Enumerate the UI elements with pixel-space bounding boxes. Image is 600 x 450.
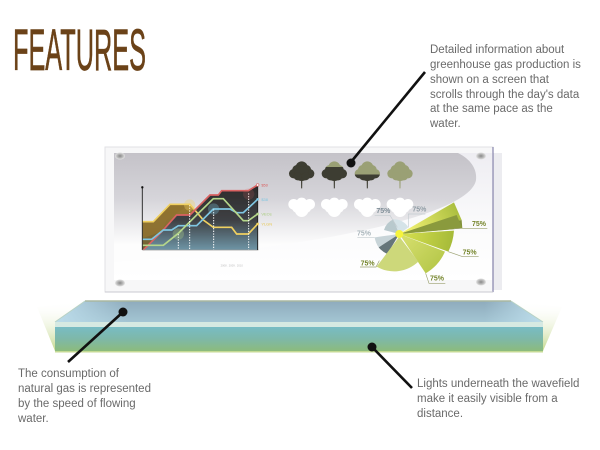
text: screen description: at the same pace as the [430,103,553,115]
line chart: VEOs [261,212,272,217]
title: FEATURES [13,19,146,83]
panel: glass display screen [105,147,502,292]
polar pie chart: 75% [430,276,445,283]
line chart: 2008 . 2009 . 2010 [221,264,243,268]
line chart: $38 [261,197,269,202]
polar pie chart: 75% [412,206,427,213]
line chart [141,183,272,268]
text: screen description: greenhouse gas production is [430,59,581,71]
text: screen description: shown on a screen that [430,74,550,86]
text: screen description: scrolls through the day's data [430,89,580,101]
polar pie chart: 75% [472,221,487,228]
leader line: lights callout [368,342,412,388]
polar pie chart: 75% [376,208,391,215]
polar pie chart: 75% [463,250,477,257]
text: natural gas description: The consumption of [18,368,120,380]
polar pie chart [357,202,487,283]
text: natural gas description: water. [17,413,49,425]
polar pie chart: 75% [357,230,372,237]
leader line: screen callout [346,72,425,168]
tree icons [288,161,413,217]
text: lights description: Lights underneath the wavefield [417,378,579,390]
text: screen description: water. [429,118,461,130]
wavefield: lit water table [37,301,562,352]
text: natural gas description: natural gas is represented [18,383,151,395]
leader line: water speed callout [68,308,128,362]
icon: screws [115,152,486,286]
text: lights description: distance. [417,408,463,420]
line chart: YLGN [261,222,272,227]
line chart: $50 [261,183,269,188]
text: natural gas description: by the speed of flowing [18,398,136,410]
polar pie chart: 75% [361,260,375,267]
text: screen description: Detailed information about [430,44,565,56]
text: lights description: make it easily visible from a [417,393,558,405]
